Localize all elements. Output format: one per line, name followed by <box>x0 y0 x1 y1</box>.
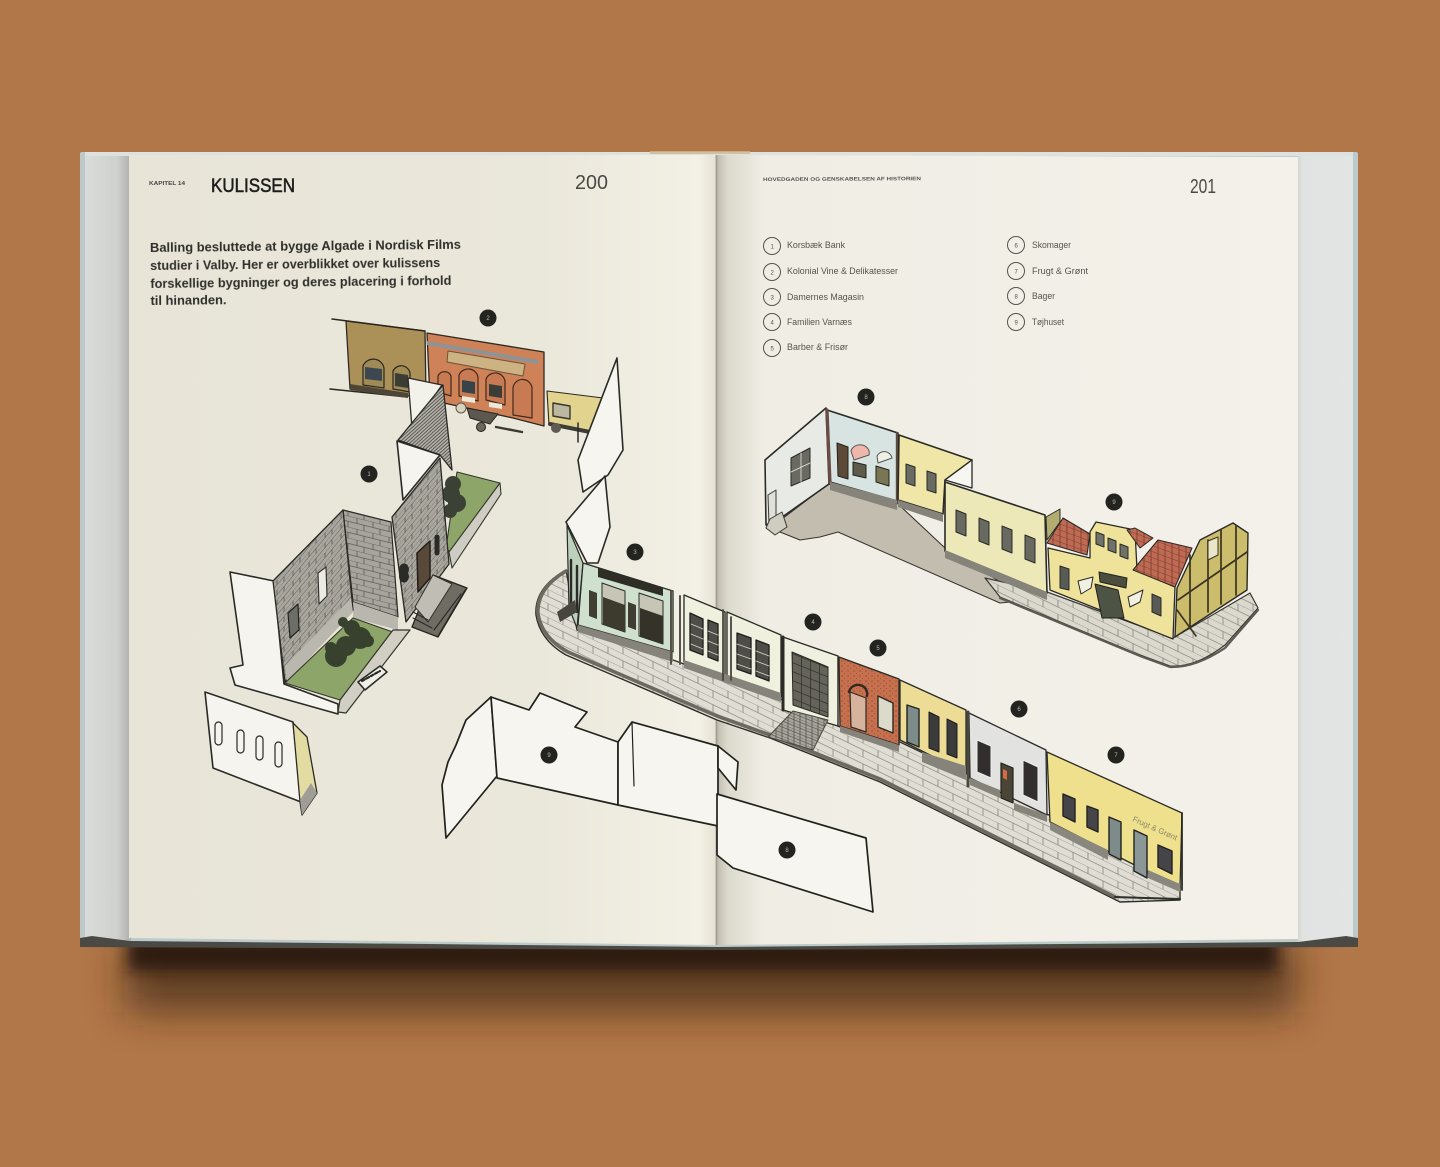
right roof <box>1133 540 1192 587</box>
badge 3 <box>626 544 644 560</box>
legend item 2 <box>764 264 898 280</box>
cover rim <box>80 152 1358 947</box>
small roof <box>1127 528 1153 548</box>
intro text: til hinanden. <box>150 292 227 308</box>
bush right <box>442 476 466 518</box>
building 5 <box>839 657 899 752</box>
legend item 9 <box>1008 314 1064 330</box>
building 7 <box>1047 752 1182 892</box>
intro text: Balling besluttede at bygge Algade i Nordisk Films <box>150 237 461 255</box>
title: KULISSEN <box>211 175 295 197</box>
sidewalk <box>536 570 1180 902</box>
grass <box>285 618 393 700</box>
flap <box>718 746 738 790</box>
main street <box>536 525 1182 902</box>
white back flat <box>408 378 442 428</box>
legend item 5: 5 <box>770 346 774 352</box>
legend item 6: Skomager <box>1032 240 1071 250</box>
curb <box>538 571 1115 897</box>
badge 8 upper: 8 <box>864 395 868 401</box>
legend item 8 <box>1008 288 1055 304</box>
badge 6: 6 <box>1017 707 1021 713</box>
legend item 8: Bager <box>1032 291 1055 301</box>
badge 4: 4 <box>811 620 815 626</box>
legend item 4: Familien Varnæs <box>787 317 852 327</box>
intro text: studier i Valby. Her er overblikket over kulissens <box>150 255 440 273</box>
spine line <box>716 155 718 945</box>
book cover and pages <box>80 151 1358 950</box>
door and ornaments <box>417 541 430 592</box>
right page header <box>763 176 1216 198</box>
building 7: Frugt & Grønt <box>1131 815 1179 843</box>
badge 2 <box>480 310 496 326</box>
badge 5: 5 <box>876 646 880 652</box>
top edge <box>85 152 1353 156</box>
upper right street <box>765 408 1258 667</box>
legend item 7 <box>1008 262 1089 280</box>
legend item 5: Barber & Frisør <box>787 342 848 352</box>
legend item 1: 1 <box>770 244 774 250</box>
left page header <box>149 172 608 197</box>
torn left fold <box>442 697 497 838</box>
steps <box>412 575 467 637</box>
stepped flat <box>491 693 618 805</box>
badge 9 flat <box>540 746 558 764</box>
legend item 6: 6 <box>1014 244 1018 250</box>
badge 9 upper <box>1106 494 1122 510</box>
legend item 3: Damernes Magasin <box>787 292 864 302</box>
badge 1: 1 <box>367 472 371 478</box>
legend item 1 <box>764 238 845 254</box>
second flat <box>618 722 718 826</box>
building 3 <box>557 525 680 664</box>
building 1: Korsbæk Bank <box>230 378 501 714</box>
legend item 3: 3 <box>770 296 774 302</box>
pale houses <box>684 595 781 702</box>
chapter label: KAPITEL 14 <box>149 181 185 187</box>
right cover <box>1298 156 1353 942</box>
badge 6 <box>1010 700 1028 718</box>
white left flat <box>230 572 338 714</box>
curb <box>338 630 410 713</box>
white fold <box>397 441 440 500</box>
tan building <box>346 321 426 398</box>
legend item 4: 4 <box>770 320 774 326</box>
badge 7 <box>1108 746 1124 764</box>
illustration: set buildings <box>205 319 1258 912</box>
bench <box>358 666 387 690</box>
rear shop <box>827 410 898 501</box>
legend item 4 <box>764 314 852 330</box>
book shadow <box>125 935 1295 1012</box>
cover bottom edge <box>80 936 1358 950</box>
intro text <box>150 237 462 308</box>
building 2: Kolonial Vine & Delikatesser <box>330 319 603 442</box>
back wall <box>343 510 398 617</box>
yellow building <box>547 391 603 432</box>
hatched rear wall <box>398 385 452 470</box>
badge 4 <box>804 614 822 630</box>
badge 5 <box>870 640 886 656</box>
building 9 <box>1046 509 1248 639</box>
lower flat <box>717 794 873 912</box>
badge 8 flat <box>778 842 796 858</box>
badge 8 flat: 8 <box>785 848 789 854</box>
legend item 9: 9 <box>1014 320 1018 326</box>
building 6 <box>968 712 1047 822</box>
badge 1 <box>360 466 378 482</box>
badge 7: 7 <box>1114 753 1118 759</box>
intro text: forskellige bygninger og deres placering i forhold <box>150 273 451 291</box>
long cream wall <box>945 482 1047 593</box>
left page <box>129 155 716 945</box>
right grass <box>446 472 500 552</box>
legend item 7: Frugt & Grønt <box>1032 266 1089 276</box>
main facade <box>392 458 449 622</box>
left roof <box>1047 518 1090 555</box>
badge 9 flat: 9 <box>547 753 551 759</box>
gilt top edge near spine <box>650 151 750 154</box>
orange building <box>427 333 544 426</box>
bushes <box>325 617 374 667</box>
numbered badges <box>360 310 1124 858</box>
steps <box>768 711 828 750</box>
cart <box>467 408 498 424</box>
building 4 <box>768 637 838 750</box>
legend item 5 <box>764 340 848 356</box>
left small flat (building 9 reverse) <box>205 692 317 815</box>
yellow house <box>900 680 966 780</box>
page number 201: 201 <box>1190 176 1216 198</box>
legend item 1: Korsbæk Bank <box>787 240 845 250</box>
legend item 8: 8 <box>1014 294 1018 300</box>
legend <box>764 236 1089 356</box>
left wall <box>273 510 353 682</box>
page number 200: 200 <box>575 172 608 194</box>
running head: HOVEDGADEN OG GENSKABELSEN AF HISTORIEN <box>763 176 921 183</box>
left wall <box>765 408 829 525</box>
badge 8 upper <box>858 388 874 406</box>
right page <box>716 155 1298 945</box>
legend item 3 <box>764 288 864 306</box>
half-timbered house <box>1175 523 1248 637</box>
legend item 9: Tøjhuset <box>1032 317 1064 327</box>
legend item 6 <box>1008 236 1071 254</box>
left cover <box>85 156 131 942</box>
badge 3: 3 <box>633 550 637 556</box>
sidewalk <box>985 578 1258 666</box>
badge 9 upper: 9 <box>1112 500 1116 506</box>
legend item 2: 2 <box>770 270 774 276</box>
yellow wall <box>898 435 972 514</box>
legend item 7: 7 <box>1014 270 1018 276</box>
legend item 2: Kolonial Vine & Delikatesser <box>787 266 898 276</box>
ground <box>770 484 1030 603</box>
white flats between streets <box>566 358 623 563</box>
flat: middle white pieces <box>442 693 873 912</box>
badge 2: 2 <box>486 316 490 322</box>
